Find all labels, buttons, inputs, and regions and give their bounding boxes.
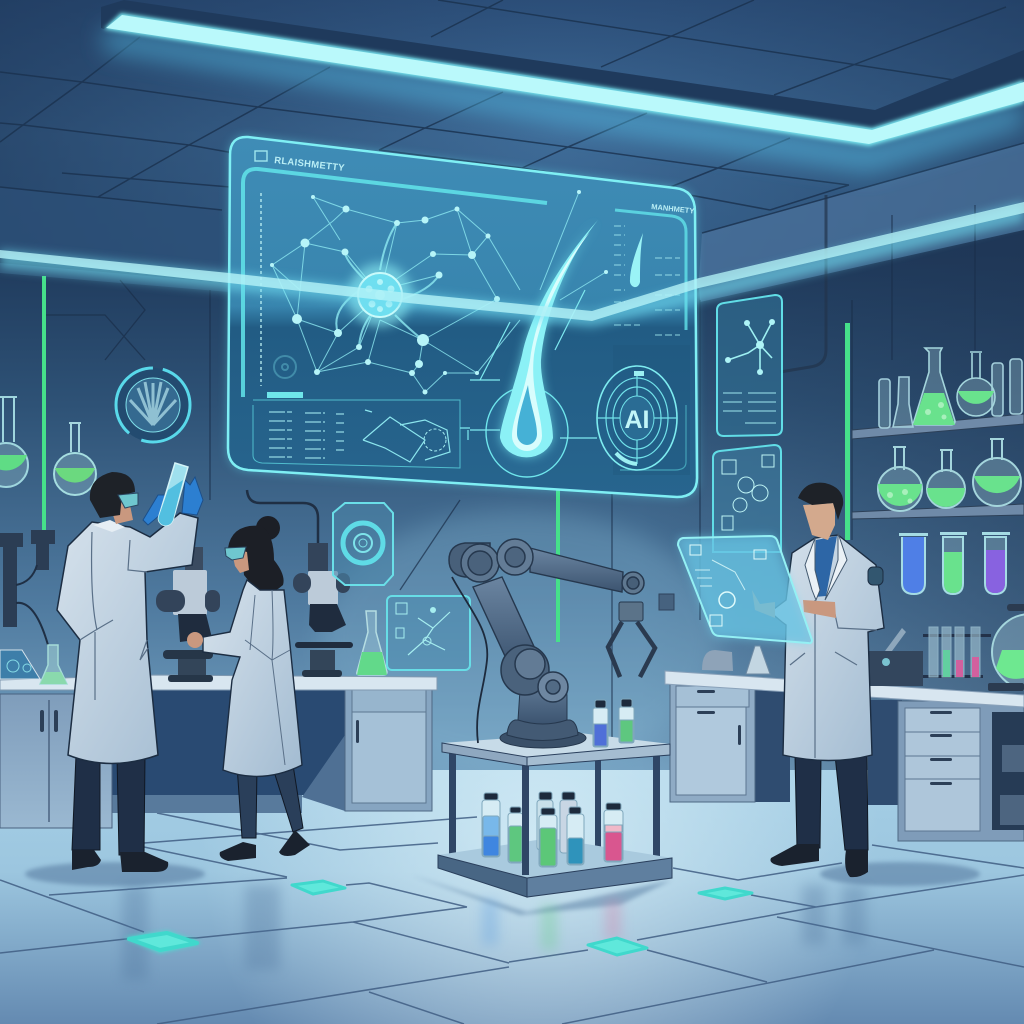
gloves	[143, 477, 203, 525]
main hologram display	[228, 137, 697, 497]
trousers	[72, 755, 145, 855]
dashed scale	[260, 193, 262, 386]
shoes	[220, 830, 310, 861]
bench dark recess	[112, 690, 347, 795]
inner frame	[243, 169, 686, 470]
microscope two	[293, 543, 353, 677]
erlenmeyer flask top	[913, 348, 955, 425]
trousers	[795, 755, 868, 850]
top shelf	[852, 348, 1024, 439]
bench top	[0, 675, 437, 690]
floor shadows and reflections	[25, 862, 980, 980]
panel heading text: MANHMETY	[651, 202, 695, 216]
cable	[247, 490, 318, 545]
top vials on table	[593, 699, 634, 747]
arm cable	[452, 577, 487, 743]
small flask on left bench	[40, 645, 67, 684]
elbow top joint	[497, 539, 644, 594]
scientist centre: woman at microscope	[187, 516, 310, 861]
wall socket	[659, 594, 674, 610]
neuron core	[348, 263, 412, 327]
gripper	[608, 602, 655, 677]
network nodes	[270, 190, 608, 394]
test tubes top	[879, 359, 1022, 428]
floor	[0, 770, 1024, 1024]
holographic tablet	[678, 536, 812, 643]
round flask top	[957, 352, 995, 416]
head and hair	[108, 495, 133, 524]
hands	[803, 600, 836, 618]
back wall	[0, 195, 1024, 860]
scientist left: man with test tube	[57, 463, 203, 872]
panel heading text: RLAISHMETTY	[274, 155, 346, 174]
horizontal light strip across wall	[0, 202, 1024, 327]
wall flask left	[0, 397, 28, 487]
test tube rack	[923, 627, 991, 678]
sleeve patch	[868, 567, 883, 585]
forearm	[530, 548, 623, 592]
face	[231, 548, 249, 573]
equipment box	[865, 628, 923, 686]
test tube	[158, 463, 188, 525]
left wall pipes	[0, 530, 55, 645]
data table	[267, 392, 450, 462]
flask on bench	[357, 611, 387, 675]
right cabinet one	[670, 684, 790, 802]
ceiling	[0, 0, 1024, 300]
lab tablet on bench	[0, 650, 40, 679]
hologram panel: emblem	[116, 368, 190, 442]
hologram: wall panel molecule	[713, 445, 781, 552]
goggles	[225, 547, 246, 560]
legs	[237, 765, 303, 838]
left cabinets	[0, 694, 112, 828]
hanging test tubes	[899, 532, 1010, 594]
neural network	[272, 192, 606, 392]
faint gear	[274, 356, 296, 378]
lab coat	[57, 513, 198, 764]
green vertical light lines	[42, 276, 850, 642]
head	[803, 503, 835, 540]
right drawers	[868, 700, 1024, 841]
lapels	[805, 533, 847, 600]
big flask on bench	[988, 604, 1024, 691]
lab coat	[770, 535, 884, 760]
lower arm	[473, 577, 537, 667]
AI gauge: AI	[624, 406, 650, 434]
hologram: wall panel network	[717, 295, 782, 436]
hologram: small network panel	[387, 596, 470, 670]
left bench	[0, 675, 437, 828]
right bench top	[665, 671, 1024, 707]
round flask three	[973, 439, 1021, 506]
elbow joint	[501, 645, 568, 702]
panel heading text	[255, 151, 695, 216]
wall flask round	[54, 423, 96, 495]
hair follicle diagram	[460, 220, 598, 477]
bench items	[702, 646, 770, 674]
shoes	[72, 850, 168, 872]
hologram: ring module	[333, 503, 393, 585]
mini hair icon	[630, 233, 643, 287]
scientist right: man with holographic tablet	[752, 483, 884, 877]
round flask one	[878, 447, 922, 511]
base	[500, 672, 586, 748]
hand	[187, 632, 203, 648]
bottom vials	[482, 792, 623, 867]
round flask two	[927, 450, 965, 508]
ceiling light strip	[101, 0, 1024, 172]
robot arm	[449, 539, 655, 748]
table top	[442, 733, 670, 766]
shirt	[814, 536, 837, 597]
shoes	[770, 844, 868, 877]
goggles	[118, 493, 138, 508]
right side data text	[614, 226, 680, 335]
bun and hair	[256, 516, 280, 540]
second shelf	[852, 439, 1024, 519]
shoulder joints	[449, 543, 499, 582]
coat	[203, 580, 302, 776]
floor light pads	[127, 881, 752, 955]
AI gauge	[597, 345, 690, 475]
right cabinet	[302, 688, 432, 811]
robot table	[438, 733, 672, 897]
lower platform	[438, 838, 672, 897]
microscope one	[156, 547, 220, 682]
